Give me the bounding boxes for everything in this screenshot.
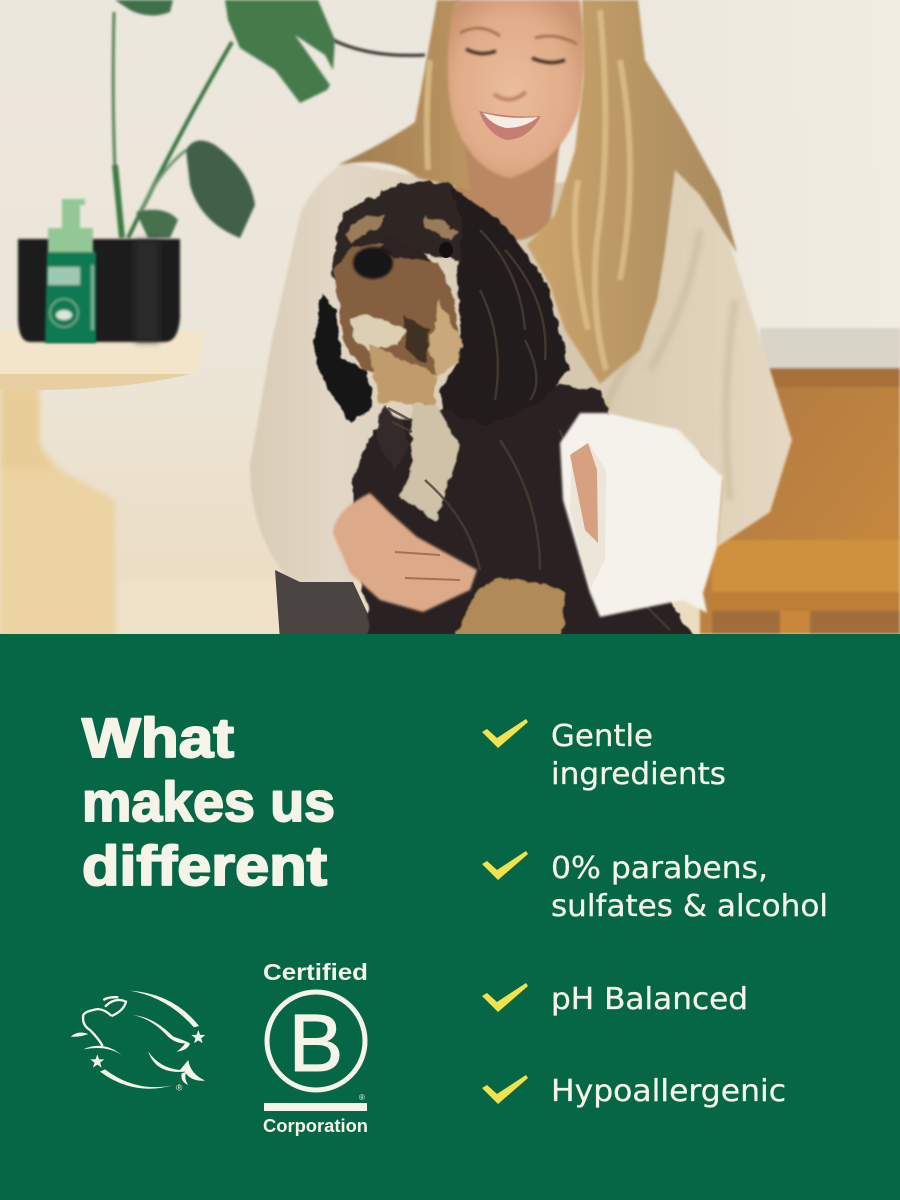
benefit: hypoallergenic: Hypoallergenic <box>551 1074 786 1109</box>
icon: certified B corporation logo: Corporation <box>263 1115 368 1136</box>
dog head top <box>330 183 460 290</box>
benefit: no parabens sulfates alcohol: 0% parabens, <box>551 851 768 886</box>
benefit: no parabens sulfates alcohol <box>482 851 828 924</box>
white chest fur <box>400 405 460 522</box>
dog eye <box>439 242 453 258</box>
icon: certified B corporation logo: ® <box>359 1093 365 1102</box>
benefit: gentle ingredients: ingredients <box>551 757 726 792</box>
side table with pedestal <box>0 385 288 640</box>
list: product benefits <box>482 719 828 1109</box>
dark face marks <box>380 235 432 262</box>
dark jaw patch <box>405 313 430 363</box>
finger lines <box>395 552 460 580</box>
heading <box>82 706 335 897</box>
fur strands <box>388 230 670 630</box>
wooden sideboard <box>700 328 900 634</box>
hair <box>338 0 737 384</box>
smile <box>479 111 541 140</box>
towel inner fold <box>570 445 606 590</box>
wall background <box>0 0 900 634</box>
dog left ear <box>313 293 373 423</box>
dog right ear <box>440 183 570 427</box>
face <box>448 0 584 178</box>
benefit: no parabens sulfates alcohol: sulfates & alcohol <box>551 889 828 924</box>
tan brow fur <box>345 215 458 245</box>
towel <box>560 413 723 617</box>
icon: certified B corporation logo <box>263 959 368 1136</box>
sweater folds <box>605 230 735 500</box>
white beard <box>352 315 405 352</box>
benefit: gentle ingredients <box>482 719 726 792</box>
photo: woman drying a dog with a towel <box>0 0 900 660</box>
heading: makes us <box>82 770 335 833</box>
hair strands <box>427 10 630 370</box>
icon: leaping bunny cruelty free logo: ® <box>176 1083 183 1093</box>
icon: certified B corporation logo: Certified <box>263 959 368 985</box>
benefit: gentle ingredients: Gentle <box>551 719 653 754</box>
plant pot <box>18 239 180 342</box>
woman's left hand <box>333 493 477 612</box>
panel: what makes us different <box>0 634 900 1200</box>
trousers <box>275 570 380 640</box>
potted plant <box>113 0 335 238</box>
tan chest <box>368 345 440 405</box>
belly tan fur <box>455 580 565 660</box>
woman's sweater <box>250 163 792 582</box>
dog nose <box>353 247 393 279</box>
dog body <box>353 385 705 660</box>
icon: leaping bunny cruelty free logo <box>71 991 205 1093</box>
light jaw fur <box>428 300 460 375</box>
heading: different <box>82 834 327 897</box>
heading: What <box>82 706 234 769</box>
eyes and brows <box>460 28 577 100</box>
neck <box>455 140 560 241</box>
icon: certified B corporation logo: B <box>289 998 343 1089</box>
woman's right hand <box>570 443 598 543</box>
dog <box>313 183 705 660</box>
benefit: pH balanced: pH Balanced <box>551 982 748 1017</box>
right wall highlight <box>600 0 900 330</box>
dog left chest dark <box>375 405 410 470</box>
dog muzzle <box>332 240 460 373</box>
table top <box>0 332 203 390</box>
foaming shampoo bottle <box>45 199 96 343</box>
mirror edge on wall <box>333 40 425 55</box>
